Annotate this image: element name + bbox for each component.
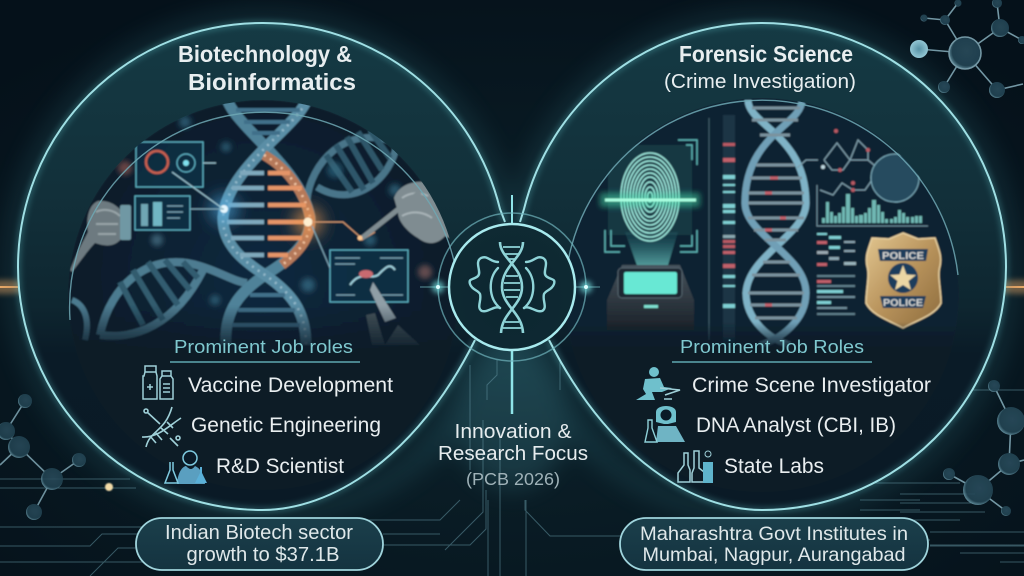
panel: dna hologram	[312, 226, 408, 322]
job roles: biotechnology: Genetic Engineering	[191, 413, 381, 437]
outer outline	[18, 23, 505, 510]
glow: gold spark on circuit	[105, 483, 113, 491]
background circuit lines	[0, 360, 1024, 576]
hologram cone	[626, 232, 678, 266]
center caption: (PCB 2026)	[466, 469, 560, 489]
heading: Prominent Job Roles	[680, 336, 864, 357]
outer outline	[520, 23, 1006, 510]
molecule diagram	[796, 128, 875, 197]
police badge: POLICE	[882, 250, 924, 262]
callout: maharashtra institutes	[620, 518, 928, 570]
title: biotechnology: Bioinformatics	[188, 69, 356, 95]
glow: horizontal light right	[944, 280, 1024, 294]
title: biotechnology	[178, 41, 356, 95]
glow nodes	[210, 195, 323, 237]
callout: indian biotech growth: growth to $37.1B	[186, 544, 340, 566]
molecule: top right	[910, 0, 1024, 98]
image disk: forensic illustration	[570, 98, 954, 348]
molecule: lower right	[943, 380, 1024, 516]
icon: lab bottles	[678, 451, 713, 483]
panel: cell hologram	[136, 142, 222, 208]
image disk: biotechnology illustration	[68, 100, 454, 346]
DNA helix: upper right	[307, 130, 397, 200]
central DNA gear emblem	[432, 213, 592, 361]
hand: left with vial	[70, 201, 131, 272]
title: forensic science	[664, 41, 856, 93]
orange connector	[312, 222, 375, 240]
icon: scientist	[165, 451, 207, 484]
scan line	[600, 193, 700, 207]
glow: horizontal light left	[0, 280, 80, 294]
callout: indian biotech growth	[136, 518, 383, 570]
bokeh lights	[118, 116, 432, 305]
callout: indian biotech growth: Indian Biotech sector	[165, 522, 353, 544]
icon: crime scene investigator	[636, 367, 680, 400]
molecule: lower left	[0, 394, 86, 520]
title: biotechnology: Biotechnology &	[178, 41, 352, 67]
panel: forensic science circle	[520, 23, 1006, 510]
job roles: biotechnology	[142, 336, 393, 484]
job roles: forensic: DNA Analyst (CBI, IB)	[696, 413, 896, 437]
icon: central dna	[500, 242, 523, 333]
bar chart	[817, 185, 928, 226]
fingerprint scanner	[607, 265, 694, 330]
panel: vials hologram	[135, 196, 224, 230]
callout: maharashtra institutes: Maharashtra Govt Institutes in	[640, 523, 908, 545]
title: forensic science: Forensic Science	[679, 41, 853, 67]
job roles: biotechnology: Vaccine Development	[188, 373, 393, 397]
icon: DNA analyst	[645, 406, 685, 442]
inner disk outline	[565, 100, 958, 320]
center caption	[438, 421, 588, 489]
DNA helix: main strand	[223, 96, 310, 345]
data rows	[817, 233, 856, 315]
police badge: POLICE	[883, 297, 923, 309]
fingerprint	[621, 153, 679, 241]
job roles: forensic: State Labs	[724, 454, 824, 478]
police badge	[866, 233, 941, 328]
center caption: Innovation &	[454, 421, 572, 443]
icon: gear outline	[470, 257, 554, 311]
bottom tool	[366, 313, 420, 345]
icon: vaccine vials	[143, 366, 173, 399]
inner disk outline	[70, 112, 456, 320]
gel electrophoresis strip	[709, 115, 735, 345]
lower fade	[78, 304, 420, 354]
textured sphere	[871, 154, 919, 202]
job roles: forensic: Crime Scene Investigator	[692, 373, 931, 397]
glowing nodes on ring	[432, 281, 592, 293]
hand: right with pen	[358, 182, 460, 243]
DNA helix: forensic	[745, 100, 806, 345]
icon: DNA with nodes	[142, 407, 181, 447]
job roles: forensic	[636, 336, 931, 483]
central connector lines	[420, 195, 600, 414]
callout: maharashtra institutes: Mumbai, Nagpur, Aurangabad	[642, 544, 906, 566]
panel: biotechnology circle	[18, 23, 505, 510]
title: forensic science: (Crime Investigation)	[664, 71, 856, 93]
fingerprint brackets	[605, 140, 697, 252]
job roles: biotechnology: R&D Scientist	[216, 454, 344, 478]
lower fade	[560, 322, 970, 350]
center caption: Research Focus	[438, 443, 588, 465]
DNA helix: lower left	[72, 260, 247, 340]
heading: Prominent Job roles	[174, 336, 353, 357]
